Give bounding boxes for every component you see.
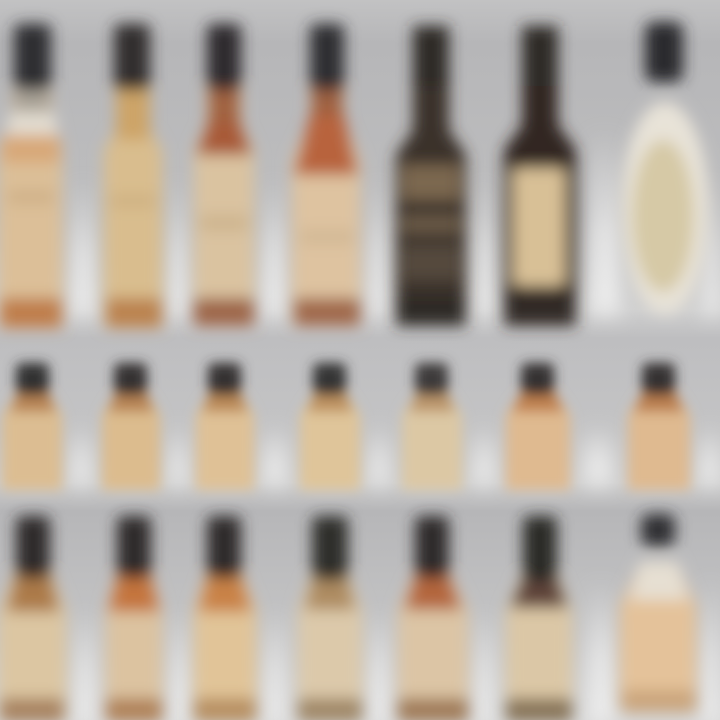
bottle 3	[194, 24, 254, 326]
bottle 6	[504, 26, 576, 326]
bottle 2	[104, 24, 162, 328]
bottle 18	[298, 516, 362, 720]
bottle 8	[2, 363, 62, 490]
row 3 bottles	[0, 514, 696, 720]
row 2 bottles	[2, 363, 690, 490]
bottle 4	[292, 24, 360, 326]
bottle 9	[102, 363, 160, 490]
bottle 17	[194, 516, 256, 720]
bottle 14	[628, 363, 690, 490]
bottle 15	[0, 516, 66, 720]
bottle 10	[196, 363, 254, 490]
bottle 5	[396, 26, 466, 326]
bottle 16	[106, 516, 162, 720]
bottle 20	[506, 516, 572, 720]
light glows between bottles	[72, 130, 720, 720]
bottle 11	[300, 363, 360, 490]
bottle 21	[620, 514, 696, 712]
bottle 12	[402, 363, 462, 490]
row 1 bottles	[0, 22, 709, 328]
bottle 1	[0, 24, 62, 328]
bottle 7	[621, 22, 709, 314]
bottle 19	[398, 516, 468, 720]
bottle 13	[506, 363, 570, 490]
